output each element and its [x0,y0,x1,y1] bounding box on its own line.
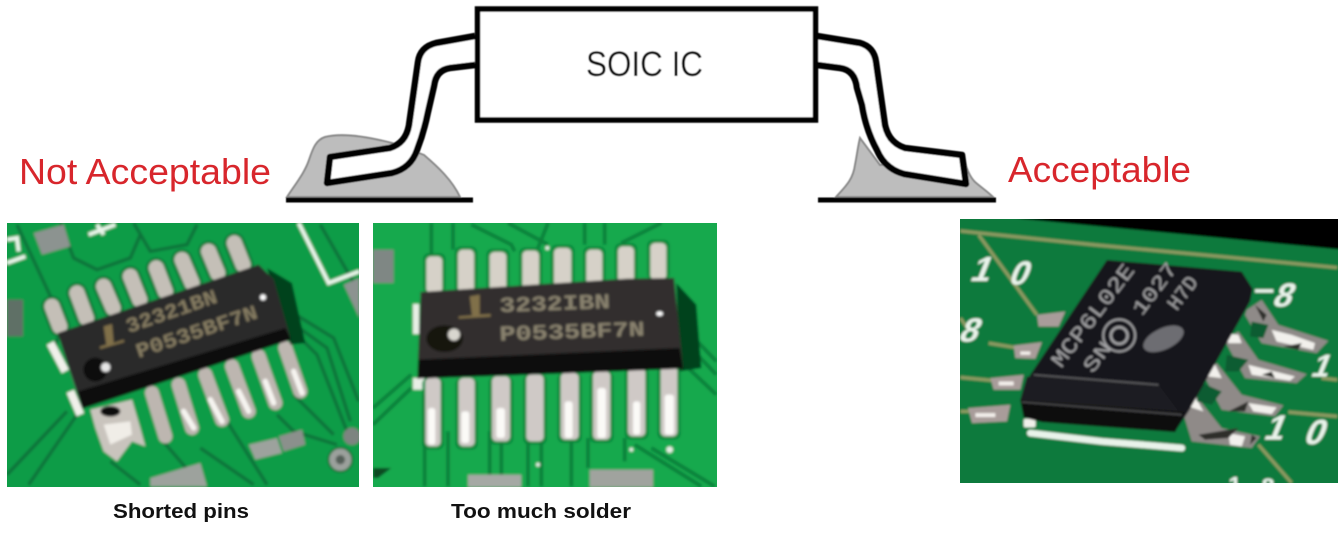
board edge traces [960,231,1337,483]
chip marking: P0535BF7N [134,303,261,365]
chip marking: SN [1080,338,1118,378]
photo: acceptable solder joint [954,219,1339,500]
caption: Shorted pins: Shorted pins [113,501,249,523]
solder fillet: excess (not acceptable) [287,135,460,197]
right pad line [818,198,996,202]
microchip logo [1139,320,1188,358]
IC label: SOIC IC [586,45,703,84]
chip marking: H7D [1164,273,1204,316]
photo: too much solder [373,223,717,487]
chip marking [1047,259,1204,378]
chip marking [123,287,261,365]
e3 circle [1103,320,1135,351]
left pad line [286,198,473,202]
silkscreen [7,223,359,283]
chip marking: MCP6L02E [1047,260,1141,373]
left edge pads [413,304,419,334]
right lead [817,36,966,184]
traces [373,223,716,486]
silkscreen numbers: 1 [1307,348,1339,383]
chip marking: 32321BN [123,287,221,340]
pin-1 dot [83,358,107,382]
silkscreen numbers: 1 [966,249,1001,289]
shorted solder blob [90,400,145,461]
white pin-1 stripe [1030,433,1182,448]
chip lower edge [1020,400,1185,432]
right pins: silver, rough solder [1180,300,1328,448]
caption: Too much solder: Too much solder [451,501,631,523]
logo mark [100,324,124,349]
top pin halos [422,240,681,450]
silkscreen numbers: 1 [1259,408,1295,447]
silkscreen numbers: 1 [1228,472,1241,498]
traces [7,223,359,485]
photo: too much solder: P0535BF7N [499,319,645,348]
bottom pins [425,366,677,446]
left lead [327,36,475,183]
silkscreen numbers: 8 [1268,278,1301,314]
silkscreen numbers: 0 [1299,412,1335,452]
silkscreen numbers: 0 [1004,255,1037,292]
logo mark [459,295,491,319]
solder fillet: correct (acceptable) [836,138,993,197]
top pins [426,243,666,293]
bottom pins [152,348,300,436]
chip shadow [267,268,305,345]
shadow gaps [1250,322,1268,338]
chip body [1020,260,1253,431]
grey pads [34,225,70,255]
silkscreen numbers [954,249,1339,500]
black background [989,212,1340,251]
heading: Not Acceptable: Not Acceptable [19,151,271,192]
top pins [52,243,243,326]
IC body [478,9,816,120]
heading: Acceptable: Acceptable [1008,149,1191,190]
chip marking: 1027 [1129,259,1183,321]
left pins [968,312,1065,423]
diagram: SOIC IC with solder joints [286,9,996,202]
chip shadow [676,283,701,371]
chip front edge [78,328,291,409]
chip body [417,278,683,379]
pin-1 dot [426,325,463,352]
chip body [58,265,290,408]
chip front edge [418,348,683,379]
photo: shorted pins [7,223,359,487]
silkscreen numbers: 8 [1262,474,1275,500]
chip marking: 3232IBN [499,291,611,319]
silkscreen numbers: 8 [954,313,988,349]
grey pads [373,250,394,283]
solder specks [666,446,673,453]
top pin halos [52,243,243,326]
